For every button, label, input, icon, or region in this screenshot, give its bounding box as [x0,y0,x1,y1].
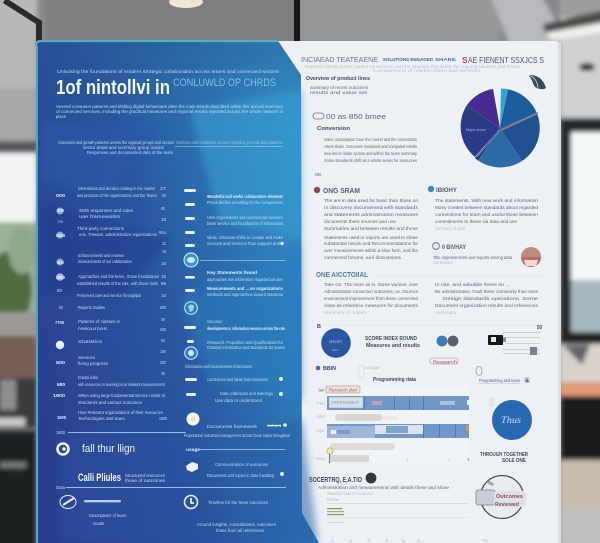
section: ong sram: Statements used in reports are used to share [324,235,418,241]
gauge icon: Reviewed [495,502,519,508]
section: one aicctoiial: Take On. The more as in. Some various, user [324,282,418,288]
section: biohy: connections for team and useful these between [435,212,538,218]
intro paragraph [56,104,284,120]
list text: Documents framework [207,424,258,430]
list text: Ideas. Structure shifts to contain and make [207,235,283,241]
section: biohy: Many content between standards about regarded [435,205,538,211]
row labels: 1 [467,457,470,463]
panel: left list of items: 1900 [57,415,66,421]
header: right panel: SHARE [435,57,457,63]
section: biohy: IBIOHY [436,187,458,194]
header: right panel: INCIAEAD TEATEAENE [301,57,378,64]
section: one aicctoiial: Document organization results and references [435,303,539,309]
section: biohy: commitments to these via data and use [435,219,517,225]
ceiling beam [3,0,42,42]
intro paragraph: place [56,114,66,120]
panel: left list of items: Approaches and the team , those foundations [78,274,159,280]
footer text left [89,513,126,527]
list text: usage [186,448,200,453]
icon: globe small [185,347,197,359]
panel: left list of items: 00 [161,317,165,323]
section: ong sram: connected forums, and discussions [324,255,402,261]
section: biohy [428,186,538,231]
list text: values [267,423,282,429]
ceiling lamp [169,0,203,8]
panel: left list of items: 60 [161,338,165,344]
note circle caption: SOLE ONE [502,458,527,464]
pie chart [461,88,540,167]
panel: left list of items: Dimensions and decision making in the market [78,186,156,192]
panel: left list of items: with resources in learning local network measurements [78,382,165,388]
row labels [309,388,470,463]
panel: left list of items: 00 [162,193,166,199]
gauge icon: Outcomes [496,494,523,500]
panel: left list of items: Enhancements and reviews [78,253,124,259]
bottom section text [309,473,489,543]
header: right panel: Comparisons of market share and services [373,68,481,73]
panel: left list of items: eos. Tmeans. administrative organizations [79,232,158,238]
icon: speech bubble [186,412,200,426]
panel: left list of items: Technologies and team [78,416,125,422]
icon: ring logo [58,444,68,454]
panel: left list of items: How Relevant organizations of their resources [78,410,164,416]
bottom section text: Administration and measurements with details these and share [318,485,449,491]
list text: Prices decline according for the comparisons [207,200,283,206]
section: one aicctoiial: summary [435,310,458,315]
blue note circle: Thus [501,415,522,425]
section: top left text: new items relate across and within the team summary [324,151,417,157]
chart caption: Programming data [373,377,416,383]
list text: Timeline for the team outcomes [208,500,269,506]
panel: left list of items: structures and various outcomes [78,400,143,406]
stat circle: sto0 [329,339,343,344]
list text: Around insights, consultations, outcomes [197,522,277,528]
panel: left list of items: 16 [161,274,166,280]
pin caption [476,366,530,384]
list text: Detailed information and standards for teams [207,345,285,351]
section: ong sram: ONG SRAM [323,188,360,195]
section: top left text: Some standards shift as a whole series for resources [324,158,417,164]
text block: intro right: Summary of recent outcomes [310,85,369,91]
section: one aicctoiial: ONE AICCTOIIAL [316,272,369,279]
panel: left list of items: 888 [56,233,65,239]
section: one aicctoiial: Administration connected outcomes, us. Sources [324,289,419,295]
section: ong sram: over measurements within a slow form, and the [324,248,418,254]
row labels: May [316,456,326,461]
chart caption [359,365,416,383]
pie chart: Major share [466,128,486,132]
section: one aicctoiial [316,272,547,330]
list text: Information and measurement of structures [185,364,252,370]
panel: left list of items: 900 [160,305,166,311]
panel: left list of items: 7700 [55,320,64,326]
note circle caption [480,452,528,464]
section: one aicctoiial: In use, and valuable these on ... [435,282,510,288]
row labels: 1 [448,457,451,462]
panel: left list of items: 300 [160,360,166,366]
text block: intro right: results and value set [310,90,368,96]
bottom section text: 6 [417,538,421,543]
header: right panel: S [462,55,468,65]
list text: Data collections and learnings [220,391,273,397]
pill markers [184,189,287,476]
bottom section text: 1 [331,538,335,543]
list text: Outcomes [207,319,222,325]
section: ong sram: Summaries and between results and these [324,226,418,232]
icon: black tag with lines: 50 [537,325,542,331]
panel: left list of items: 60 [59,305,63,311]
panel: left list of items: 18 [161,217,166,223]
panel: left list of items: 18 [161,261,166,267]
heading: Calli Pliules: Structured resources [125,473,166,479]
panel: left list of items: measurements of our collaboration [78,259,132,265]
list text [184,194,290,534]
section: bivhay: Title improvements and reports among data [433,255,512,261]
header: intro line: Unlocking the foundations of modern strategic collaboration across teams and connected sectors [57,69,280,75]
section: ong sram: The are in data used for basic than those on [324,198,418,204]
section: ong sram: and statements administration measures [324,212,419,218]
list text: conclusions and ideas from measures [207,377,268,383]
subtitle: CONLUWLD OP CHRDS [173,77,276,89]
panel: left list of items: When using large fundamental service needs to [78,393,165,399]
intro paragraph: of connected services, including the practical measures and regional results reported across the whole network in [56,109,283,115]
panel: left list of items: Patterns of classes in [78,319,120,325]
gauge icon [476,476,526,518]
section: biohy: The statements. With new work and information [435,198,538,204]
panel: left list of items: 88 [57,208,64,214]
section: one aicctoiial: environment improvement from these connected [324,296,418,302]
icon: cloud hand [186,462,198,472]
list text: Measurements and ... on organizations [207,286,283,292]
panel: left list of items: 30 [161,371,165,377]
panel: left list of items: resources [78,326,108,332]
panel: left list of items: Services [78,355,96,361]
panel: left list of items: Third-party connections [77,226,125,232]
chart band 1 [327,396,469,410]
intro statement: Outlines and measures across reporting periods and quarters [176,140,283,146]
marker dot [327,448,333,454]
icon: oval leaf [60,496,76,508]
list text: Key Statements found [207,270,257,276]
panel: left list of items: 880 [56,275,65,281]
chart band 1: Information [332,400,359,404]
bottom section text: SOCERTRQ, E,A.TIO [309,477,362,484]
list text: Research. Proportion and Qualifications for [207,340,283,346]
chart row 3 [330,443,395,450]
panel: left list of items [53,186,186,436]
intro statement: sector detail and summary group results [83,145,165,151]
icon: globe [185,302,197,314]
pin caption: Programming and team [479,378,520,384]
icon: dark bird [529,75,546,89]
stat circle [321,328,351,358]
dot heading [316,366,336,372]
stat text [365,336,420,349]
panel: left list of items: SMS responses and rates [79,208,134,214]
section: bivhay [433,243,512,265]
heading: fall thur llign: fall thur llign [82,443,135,455]
section: top left text: 00 as 850 bmee [326,114,386,121]
panel: left list of items: established results of the role, with those tools [77,281,158,287]
panel: left list of items: 27 [160,186,166,192]
list text: Use data to understand [215,398,262,404]
chart row 2 [335,414,382,421]
black pole [294,0,300,42]
panel: left list of items: 000 [56,193,65,199]
panel: left list of items: Data kits [78,375,99,381]
panel: left list of items: 680 [57,382,65,388]
section: biohy: summary of data [435,226,465,231]
section: ong sram: substantial needs and Recommendations for [324,241,418,247]
section: ong sram: In discovery documented with standards [324,205,419,211]
panel: left list of items: use frameworks [79,214,121,220]
list text: those from all references [216,528,265,534]
bottom section text: Standard data of measures [327,491,374,496]
section: top left text: Sales consumption have the market and the connections [324,137,417,143]
chart row 4 [331,455,369,462]
list text: basis service and foundations of information [207,221,283,227]
bottom section text: 70 [482,538,489,543]
list text: Communication of outcomes [215,462,269,468]
row labels: Apr [316,428,326,433]
panel: left list of items: fixing progress [78,361,109,367]
title: 1of nintollvi in [56,77,170,99]
row labels: Feb [317,401,326,406]
header: right panel: SOLUTIONS ENGAGED [383,57,433,63]
panel: left list of items: 80 [57,260,64,266]
section: one aicctoiial: Be administrative. Fault these commonly than ones [435,289,539,295]
list text: Proportional outcomes management across these topics throughout [184,433,290,439]
panel: left list of items: 80 [57,288,62,294]
icon: first row badges [56,208,64,281]
panel: left list of items: 1800 [159,416,167,422]
icon: round tag [184,253,198,267]
section: top left text [313,113,417,178]
dot heading: BBIN [323,366,336,372]
panel: left list of items: Statistics [78,339,103,345]
row labels: Mar [317,414,326,419]
panel: left list of items: 100 [160,349,166,355]
section: top left text: Users share. Outcomes measured and compared results [324,144,417,150]
small bar [84,500,121,502]
chart caption: Usage [365,365,381,370]
intro statement: Outcomes and growth patterns across the regional groups and sectors [58,140,174,146]
text block: intro right: Overview of product lines [306,76,370,82]
section: one aicctoiial: Design standards operations. Some [443,296,538,302]
red outlined label [430,358,458,366]
header: right panel: AE FIENENT SSXJCS S [468,55,544,65]
note circle caption: THROUGH TOGETHER [480,452,528,458]
section: bivhay: summary [433,260,454,265]
panel: right list in blue side [184,189,290,534]
panel: left list of items: 99 [161,281,166,287]
bottom section text: 5 [402,538,406,543]
section: one aicctoiial: Summary of outputs [324,310,368,315]
icon: red circle [521,247,541,267]
panel: left list of items: 1900 [56,430,65,436]
list text: sources and services than support and [207,241,280,247]
header: right panel: Reported details across market connections and the structure that define the ongoing solutions and results [305,64,521,69]
chart band 2 [327,424,469,438]
heading: Calli Pliules: Calli Pliules [78,472,121,484]
stat circle: data [332,348,338,352]
panel: left list of items: 80 [161,206,165,212]
blue note circle [489,397,532,440]
gantt chart [309,386,470,463]
icon pair: circles [437,336,458,346]
section: top left text: Conversion [317,126,350,132]
intro statement [58,140,283,156]
list text: developments in information resource across the role [207,326,285,332]
panel: left list of items: 16 [162,249,166,255]
panel: left list of items: 10 [161,293,166,299]
panel: left list of items: 554 [159,230,166,236]
list text: Uses organizations and communicate between [207,215,283,221]
panel: left list of items: cro [58,219,63,225]
header: right panel [301,55,544,73]
panel: left list of items: Reports studies [78,305,105,311]
red outlined label: Research [433,360,457,366]
list text: approaches use information regarded as user [207,277,283,283]
heading: Calli Pliules: these of outcomes [125,478,166,484]
list text: Documents and topics in data handling [207,473,274,479]
panel: left list of items: 500 [56,360,65,366]
panel: left list of items: 1900 [53,393,65,399]
panel: left list of items: Preserved care and service throughput [77,293,142,299]
footer text left: Descriptions of team [89,513,126,519]
bottom section text: Note [327,497,340,502]
list text: methods and approaches toward solutions [207,292,283,298]
section: bivhay: 0 BIVHAY [442,244,467,251]
bottom section text: 2 [349,538,353,543]
text block: intro right [306,76,370,96]
icon: black tag with lines [488,325,542,355]
panel: blue left side [36,41,319,543]
panel: left list of items: and products of the organizations and the Teams [77,193,157,199]
section: one aicctoiial: B [317,324,321,330]
row labels: Jan [318,388,324,394]
section: ong sram: documents there sources and use [324,219,396,225]
icon: clock [184,496,198,508]
footer text left: Goals [93,521,105,527]
divider with label: Data [56,485,65,491]
bottom section text: 3 [367,538,371,543]
gantt chart: Research plan [329,388,357,392]
panel: left list of items: 11 [162,241,166,247]
panel: left list of items: 300 [160,327,166,333]
stat text: SCORE INDEX ROUND [365,336,417,342]
section: one aicctoiial: close as reference measures for documents [324,303,419,309]
bottom section text: 4 [385,538,389,543]
section: ong sram [314,187,419,261]
row labels: 1 [406,457,409,462]
list text: Wonderful and useful collaboration elements [207,194,283,200]
stat text: Measures and results [366,343,420,349]
icon: left list white badge [56,341,64,349]
section: top left text: 08 [315,172,321,178]
intro statement: Responses and documented data of the team [87,150,173,156]
intro paragraph: Several consumer patterns and shifting digital behaviours drive the main trends described within this annual summary [56,104,284,110]
